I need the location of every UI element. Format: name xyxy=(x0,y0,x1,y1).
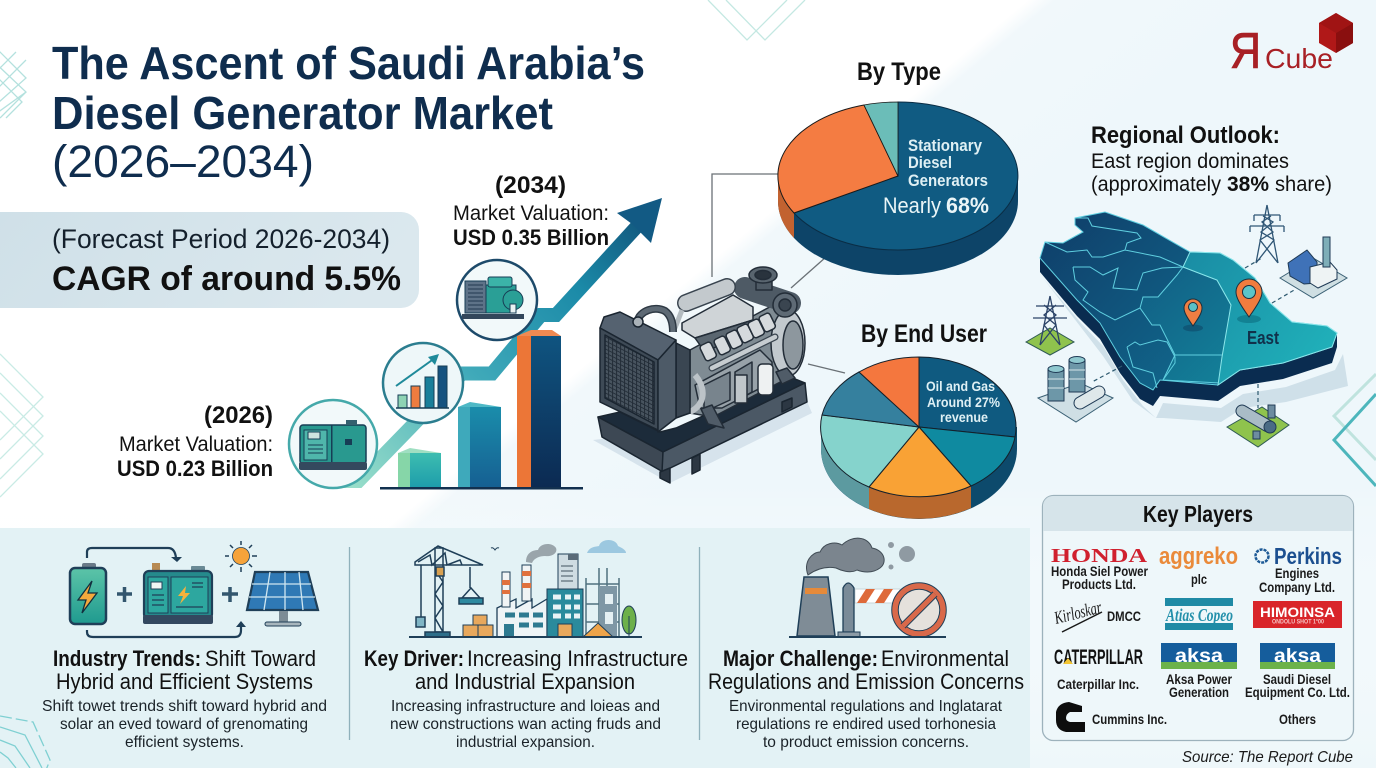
decorative lattice: top left xyxy=(0,50,26,118)
label: 2034 valuation xyxy=(453,172,609,250)
pie chart: by end user: Around 27% xyxy=(927,394,1000,410)
smoke cloud xyxy=(807,538,884,575)
CAGR callout: (Forecast Period 2026-2034) xyxy=(52,224,390,254)
region: central xyxy=(1140,267,1231,383)
decorative lattice: left middle xyxy=(0,354,43,497)
barrier post and arm xyxy=(855,589,900,603)
icon: generator 2026 xyxy=(289,400,377,488)
Caterpillar: Caterpillar Inc. xyxy=(1057,676,1139,692)
label: 2034 valuation: (2034) xyxy=(495,172,566,199)
Saudi Diesel xyxy=(1245,643,1350,700)
connector lines xyxy=(1092,258,1296,408)
body text: Environmental regulations and Inglatarat xyxy=(729,698,1003,715)
Honda xyxy=(1051,545,1148,592)
heading: Environmental xyxy=(881,646,1009,671)
Saudi Diesel: aksa xyxy=(1274,646,1321,667)
pie chart: by type: 68% xyxy=(946,193,989,218)
pin: east xyxy=(1236,279,1262,323)
label: east: East xyxy=(1247,328,1279,348)
icon: bar chart with arrow xyxy=(383,343,463,423)
heading xyxy=(53,646,316,694)
label: 2026 valuation: USD 0.23 Billion xyxy=(117,456,273,481)
pie chart: by type xyxy=(778,58,1018,275)
sun xyxy=(232,548,250,564)
Perkins: Company Ltd. xyxy=(1259,579,1335,595)
body text: industrial expansion. xyxy=(456,734,595,751)
title: (2026–2034) xyxy=(52,136,314,187)
pie chart: by type: Stationary xyxy=(908,137,983,155)
CAGR callout xyxy=(0,212,419,308)
body text xyxy=(42,698,327,751)
heading xyxy=(364,646,688,694)
label: 2034 valuation: Market Valuation: xyxy=(453,202,609,225)
CAGR callout: CAGR of around 5.5% xyxy=(52,260,401,298)
icon: pylon on green base xyxy=(1026,296,1074,355)
icon: pylon north xyxy=(1250,205,1284,263)
logo: Cube xyxy=(1265,43,1333,74)
decorative diamonds: right xyxy=(1334,374,1376,486)
Honda: Products Ltd. xyxy=(1062,576,1136,592)
Atlas Copco: Atias Copeo xyxy=(1165,605,1233,625)
panel: bottom band xyxy=(0,528,1030,768)
heading xyxy=(708,646,1024,694)
bars xyxy=(380,330,583,490)
Aggreko: plc xyxy=(1191,571,1207,587)
regional outlook text: (approximately xyxy=(1091,173,1221,196)
growth chart xyxy=(289,198,662,500)
Caterpillar: CATERPILLAR xyxy=(1054,646,1143,669)
Himoinsa: HIMOINSA xyxy=(1260,604,1335,620)
pie chart: by end user xyxy=(821,320,1017,519)
Aksa Power: Generation xyxy=(1169,684,1229,700)
body text: regulations re endired used torhonesia xyxy=(736,716,996,733)
Aggreko: aggreko xyxy=(1159,543,1238,570)
title: The Ascent of Saudi Arabia’s xyxy=(52,37,645,89)
icon: generator 2034 xyxy=(457,260,537,340)
heading: Key Driver: xyxy=(364,646,464,671)
panel: major challenge xyxy=(708,538,1024,751)
bird xyxy=(491,548,499,550)
body text: Shift towet trends shift toward hybrid and xyxy=(42,698,327,715)
scaffold xyxy=(586,568,619,637)
Perkins: Perkins xyxy=(1274,543,1342,569)
Himoinsa: ONDOLU SHOT 1°00 xyxy=(1272,620,1325,626)
heading: and Industrial Expansion xyxy=(415,669,635,694)
generator xyxy=(191,566,205,572)
Honda: Honda Siel Power xyxy=(1051,563,1148,579)
Caterpillar xyxy=(1054,646,1143,692)
factory xyxy=(497,599,547,637)
heading: by type: By Type xyxy=(857,58,941,86)
icon: construction and industry xyxy=(409,540,642,637)
logo: Я xyxy=(1230,23,1261,79)
cooling tower xyxy=(797,577,835,636)
body text xyxy=(729,698,1003,751)
icon: storage tanks xyxy=(1038,356,1113,422)
pin: central xyxy=(1183,299,1203,332)
prohibition sign xyxy=(895,586,943,634)
label: 2026 valuation xyxy=(117,402,273,481)
heading: Regulations and Emission Concerns xyxy=(708,669,1024,694)
heading: Hybrid and Efficient Systems xyxy=(56,669,313,694)
Aggreko xyxy=(1159,543,1238,587)
skid base xyxy=(598,377,807,483)
body text: solar an eved toward of grenomating xyxy=(60,716,308,733)
Himoinsa xyxy=(1253,601,1342,628)
Aksa Power: aksa xyxy=(1175,646,1223,667)
Kirloskar xyxy=(1051,597,1141,632)
region: east xyxy=(1183,252,1337,385)
heading: Major Challenge: xyxy=(723,646,878,671)
icon: hybrid system xyxy=(70,541,318,637)
flow arrows xyxy=(87,548,241,637)
Kirloskar: Kirloskar xyxy=(1051,597,1104,628)
Saudi Diesel: Equipment Co. Ltd. xyxy=(1245,684,1350,700)
tree xyxy=(622,606,636,634)
regional outlook text: share) xyxy=(1275,173,1332,196)
source: Source: The Report Cube xyxy=(1182,749,1353,766)
leader lines xyxy=(712,174,845,373)
regional outlook text: East region dominates xyxy=(1091,150,1289,173)
body text: new constructions wan acting fruds and xyxy=(390,716,661,733)
Kirloskar: DMCC xyxy=(1107,608,1141,624)
heading: Increasing Infrastructure xyxy=(467,646,688,671)
Saudi Diesel: Saudi Diesel xyxy=(1263,671,1331,687)
pie chart: by type: Diesel xyxy=(908,154,952,172)
body text: to product emission concerns. xyxy=(763,734,969,751)
Perkins: Engines xyxy=(1275,565,1319,581)
Others: Others xyxy=(1279,711,1316,727)
regional outlook text xyxy=(1091,122,1332,196)
body text: efficient systems. xyxy=(125,734,244,751)
Aksa Power xyxy=(1161,643,1237,700)
title: Diesel Generator Market xyxy=(52,87,553,139)
radiator xyxy=(600,309,690,432)
Atlas Copco xyxy=(1165,598,1233,630)
heading: Industry Trends: xyxy=(53,646,201,671)
heading: by end user: By End User xyxy=(861,320,987,348)
label: 2026 valuation: (2026) xyxy=(204,402,273,429)
icon: pipeline on green base xyxy=(1227,405,1289,447)
logo xyxy=(1230,13,1353,79)
Cummins: Cummins Inc. xyxy=(1092,711,1167,727)
pie chart: by type: Generators xyxy=(908,172,988,190)
pie chart: by end user: revenue xyxy=(940,409,988,425)
label: 2034 valuation: USD 0.35 Billion xyxy=(453,225,609,250)
engine block xyxy=(675,267,805,428)
map: Saudi Arabia xyxy=(1040,212,1348,422)
pie chart: by type: Nearly xyxy=(883,193,941,218)
Honda: HONDA xyxy=(1051,545,1148,567)
icon: diesel engine xyxy=(593,267,812,483)
buildings xyxy=(558,554,578,590)
title xyxy=(52,37,645,187)
boxes xyxy=(463,615,493,637)
battery xyxy=(82,563,96,569)
panel: key players xyxy=(1042,496,1354,740)
Cummins xyxy=(1056,702,1167,732)
crane xyxy=(415,546,483,637)
pie chart: by end user: Oil and Gas xyxy=(926,378,995,394)
icon: factory xyxy=(1280,237,1347,298)
Aksa Power: Aksa Power xyxy=(1166,671,1232,687)
body text xyxy=(390,698,661,751)
regional outlook text: 38% xyxy=(1227,173,1269,196)
cloud xyxy=(587,540,626,553)
decorative hexagon lines: bottom left xyxy=(0,716,50,768)
icon: emissions and barrier xyxy=(789,538,946,637)
Perkins xyxy=(1256,543,1342,595)
heading: key players: Key Players xyxy=(1143,501,1253,527)
panel: key driver xyxy=(364,540,688,751)
solar panel xyxy=(247,572,318,610)
decorative chevrons: top centre xyxy=(708,0,805,40)
label: 2026 valuation: Market Valuation: xyxy=(119,433,273,456)
regional outlook text: Regional Outlook: xyxy=(1091,122,1280,149)
smoke xyxy=(526,544,556,563)
panel: industry trends xyxy=(42,541,327,751)
heading: Shift Toward xyxy=(205,646,316,671)
growth arrow xyxy=(340,198,662,500)
body text: Increasing infrastructure and loieas and xyxy=(391,698,660,715)
